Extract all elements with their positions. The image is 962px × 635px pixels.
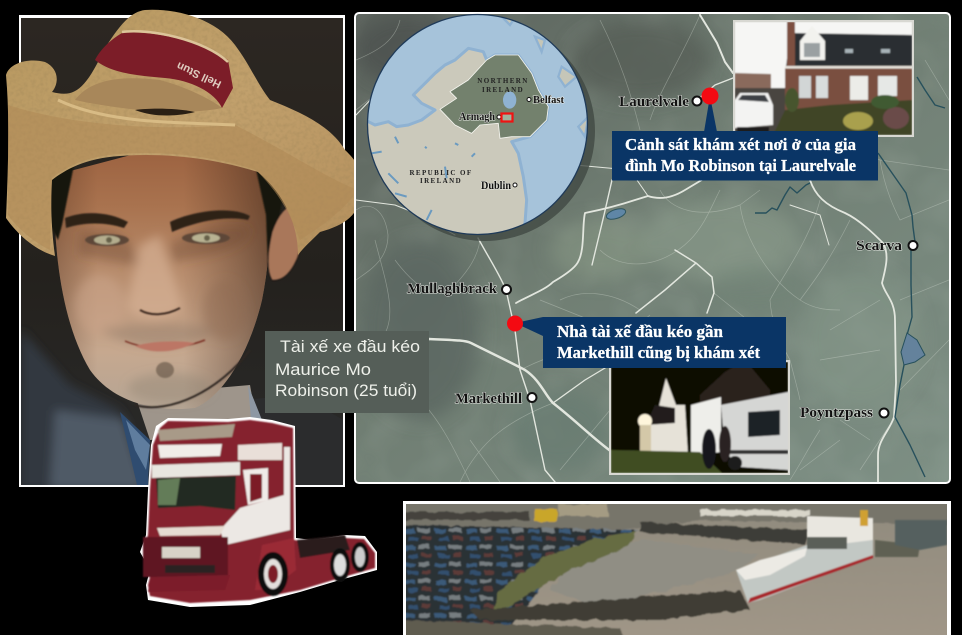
far dock [406,504,947,531]
photo: Markethill house at night [609,360,790,475]
inset locator globe: IRELAND [482,86,524,94]
label: Laurelvale: Laurelvale [619,94,689,110]
inset locator globe: Belfast [533,94,564,106]
callout: Markethill search: Markethill cũng bị khám xét [557,343,760,362]
map base [356,14,949,482]
lakes [372,137,475,220]
land: Ireland [362,48,548,250]
ramp and pontoon [875,540,920,557]
green embankment [490,532,637,615]
inset locator globe [362,14,595,250]
panel: portrait photo of the driver [19,15,352,490]
label: Mullaghbrack: Mullaghbrack [407,281,498,297]
inset locator globe: Dublin [481,178,511,192]
lake: small lough [606,208,626,220]
caption: driver name: Tài xế xe đầu kéo [280,337,420,356]
land: Scotland and coast fragments [502,17,588,137]
car terminal [406,524,638,626]
main roads [356,15,896,482]
inset locator globe: IRELAND [420,177,462,185]
caption: driver name: Maurice Mo [275,360,371,379]
minor roads [356,15,949,482]
rivers [755,77,945,477]
map tonal patches [355,15,920,470]
caption: driver name: Robinson (25 tuổi) [275,381,417,400]
locator rectangle [502,114,512,122]
caption: driver name [265,331,429,413]
lough Neagh [503,91,516,109]
callout: Markethill search: Nhà tài xế đầu kéo gần [557,322,724,341]
ferry hull [736,540,873,603]
inset locator globe: Armagh [459,109,495,123]
photo: Laurelvale house [733,20,914,137]
ferry superstructure [807,516,873,548]
label: Poyntzpass: Poyntzpass [800,405,873,421]
inset locator globe: REPUBLIC OF [409,169,473,177]
icon: red truck cutout [140,417,377,607]
photo: port with ferry [400,498,953,635]
callout: Laurelvale search: đình Mo Robinson tại Laurelvale [625,156,856,175]
icon: straw cowboy hat [6,10,363,256]
panel: map [354,12,951,484]
tidal mud [551,574,718,602]
lake: large lough [901,333,925,365]
callout: Laurelvale search: Cảnh sát khám xét nơi ở của gia [625,135,856,154]
lower quay [470,590,750,620]
icon: straw cowboy hat: Hell Stun [175,59,223,90]
callout: Laurelvale search [612,88,878,180]
callout: Markethill search [507,316,786,368]
label: Markethill: Markethill [455,391,522,407]
label: Scarva: Scarva [856,238,903,254]
inset labels: NORTHERN [477,77,529,85]
land: Northern Ireland [440,55,548,138]
